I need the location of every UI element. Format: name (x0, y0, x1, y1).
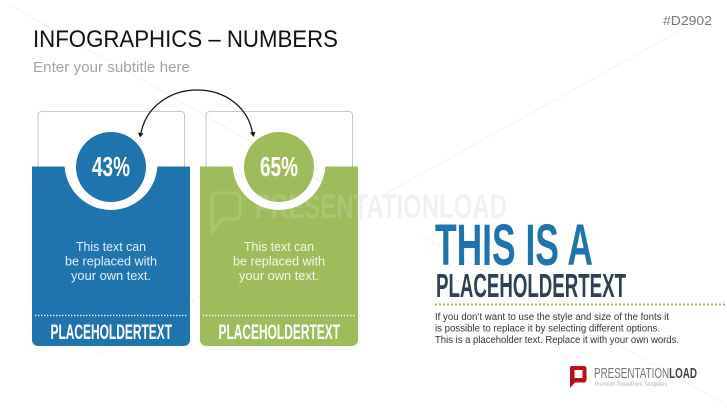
subtitle: Enter your subtitle here (33, 60, 190, 76)
watermark: PRESENTATIONLOAD (255, 188, 507, 226)
body paragraph: is possible to replace it by selecting different options. (435, 324, 660, 334)
panel: green card (200, 112, 358, 346)
document code: #D2902 (663, 13, 712, 28)
card label: PLACEHOLDERTEXT (50, 321, 172, 344)
logo tagline: Premium PowerPoint Templates (595, 382, 667, 388)
logo wordmark: PRESENTATIONLOAD (594, 366, 697, 382)
card description: be replaced with (233, 254, 325, 268)
card label: PLACEHOLDERTEXT (218, 321, 340, 344)
card description: your own text. (71, 269, 151, 283)
card outline (38, 112, 184, 167)
arrow: double-headed curve between circles (138, 90, 256, 138)
percentage value: 43% (92, 151, 130, 182)
body paragraph (435, 312, 679, 346)
watermark: PRESENTATIONLOAD (255, 188, 507, 226)
icon: logo mark (570, 366, 586, 388)
card body (32, 166, 190, 346)
percentage value: 65% (260, 151, 298, 182)
percentage circle (76, 132, 146, 202)
body paragraph: If you don’t want to use the style and size of the fonts it (435, 312, 669, 323)
watermark (212, 188, 507, 232)
heading: this is a: THIS IS A (435, 213, 593, 278)
logo (570, 366, 697, 388)
card description (233, 240, 325, 283)
panel: blue card (32, 112, 190, 346)
card description (65, 240, 157, 283)
card description: be replaced with (65, 254, 157, 268)
card outline (206, 112, 352, 167)
card description: your own text. (239, 269, 319, 283)
title: INFOGRAPHICS – NUMBERS (33, 26, 338, 53)
percentage circle (244, 132, 314, 202)
body paragraph: This is a placeholder text. Replace it with your own words. (435, 335, 679, 346)
card description: This text can (244, 240, 314, 254)
card body (200, 166, 358, 346)
card description: This text can (76, 240, 146, 254)
